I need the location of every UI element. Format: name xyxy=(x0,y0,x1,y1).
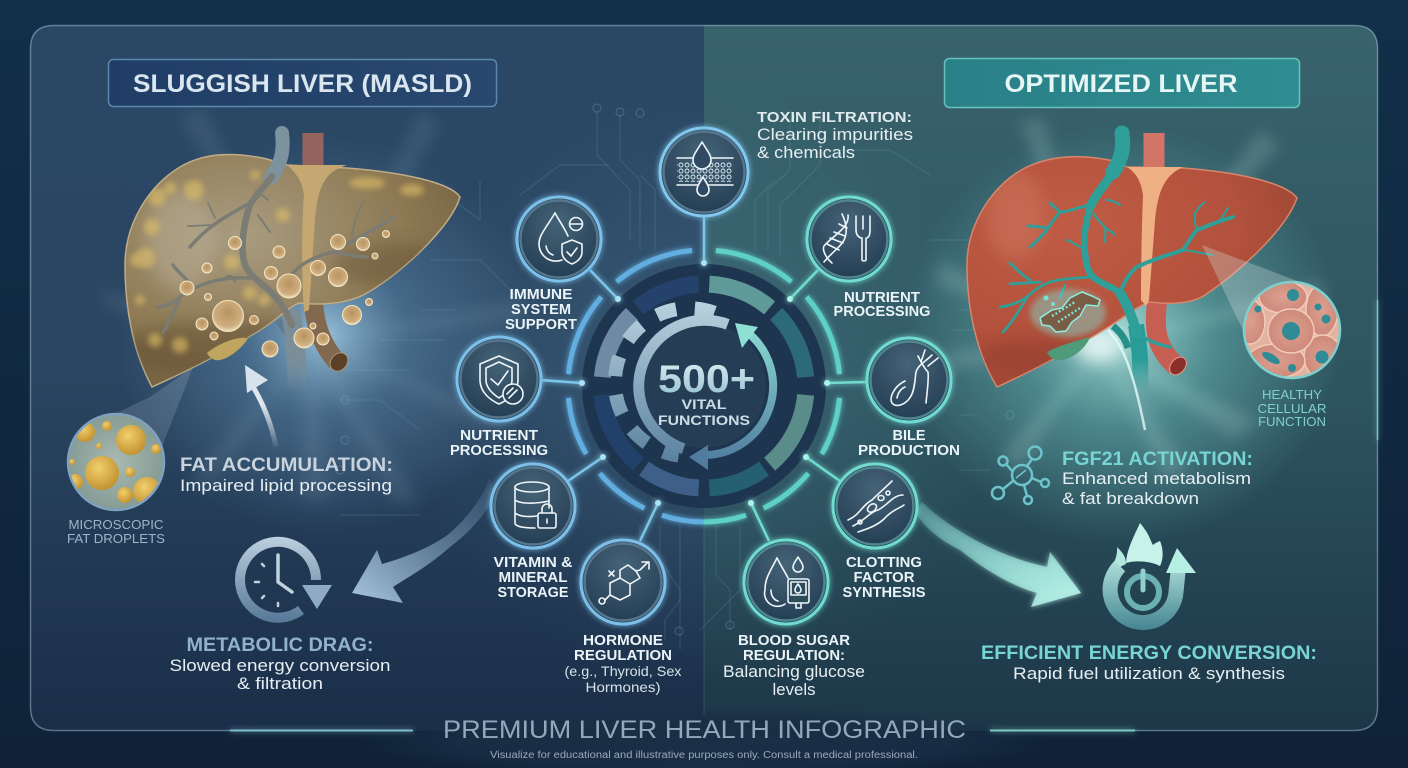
hub disc xyxy=(582,264,826,508)
illustration: healthy liver xyxy=(967,133,1297,430)
node: blood sugar regulation xyxy=(744,540,828,624)
outer glowing ring segments xyxy=(568,250,840,522)
text: clotting factor synthesis: FACTOR xyxy=(854,570,915,586)
node: vitamin and mineral storage xyxy=(491,464,575,548)
text: efficient energy conversion: EFFICIENT ENERGY CONVERSION: xyxy=(981,642,1317,664)
label: microscopic fat droplets xyxy=(67,518,165,546)
text: toxin filtration: & chemicals xyxy=(757,144,855,162)
text: clotting factor synthesis: SYNTHESIS xyxy=(842,585,926,601)
label: healthy cellular function: HEALTHY xyxy=(1262,387,1322,402)
text: bile production xyxy=(858,428,960,459)
illustration: fatty liver xyxy=(120,133,460,392)
text: bile production: PRODUCTION xyxy=(858,443,960,459)
icon: droplet through filter xyxy=(677,142,733,196)
text: FGF21 activation: & fat breakdown xyxy=(1062,490,1199,508)
text: hormone regulation: REGULATION xyxy=(574,648,672,664)
text: blood sugar regulation: Balancing glucose xyxy=(723,663,865,681)
text: fat accumulation: FAT ACCUMULATION: xyxy=(180,455,393,476)
text: nutrient processing right: NUTRIENT xyxy=(844,290,920,306)
callout wedge to cell view xyxy=(1202,245,1308,345)
label: healthy cellular function xyxy=(1258,387,1326,429)
text: nutrient processing right xyxy=(834,290,930,320)
arrow: center to efficient energy xyxy=(915,502,1081,607)
callout wedge to microscope xyxy=(85,367,193,452)
text: hormone regulation xyxy=(564,633,682,695)
text: bile production: BILE xyxy=(892,428,926,444)
icon: power flame with up arrow xyxy=(1110,523,1196,623)
text: vitamin and mineral storage xyxy=(494,555,573,601)
text: metabolic drag xyxy=(170,634,390,693)
icon: clock with downward arrow xyxy=(240,542,332,618)
label: healthy cellular function: FUNCTION xyxy=(1258,414,1326,429)
icon: molecule xyxy=(992,446,1049,504)
text: blood sugar regulation: REGULATION: xyxy=(743,648,845,664)
center glow and circuit traces xyxy=(336,86,1014,715)
heading: optimized liver: OPTIMIZED LIVER xyxy=(1004,70,1238,98)
circular arrows xyxy=(689,323,773,470)
text: clotting factor synthesis: CLOTTING xyxy=(846,555,922,571)
arrow pointing to the fatty deposit xyxy=(245,365,276,447)
text: toxin filtration: TOXIN FILTRATION: xyxy=(757,109,912,126)
center hub: 500+ vital functions xyxy=(568,250,840,522)
footer title: PREMIUM LIVER HEALTH INFOGRAPHIC xyxy=(443,716,966,744)
text: nutrient processing left xyxy=(450,428,548,459)
text: nutrient processing left: NUTRIENT xyxy=(460,428,538,444)
footer disclaimer: Visualize for educational and illustrative purposes only. Consult a medical professional. xyxy=(490,750,918,761)
heading: optimized liver xyxy=(944,58,1300,108)
text: hormone regulation: HORMONE xyxy=(583,633,663,649)
icon: DNA and fork xyxy=(823,214,870,263)
text: 500+ vital functions: 500+ xyxy=(658,358,755,401)
text: immune system support: SUPPORT xyxy=(505,317,577,333)
text: immune system support: SYSTEM xyxy=(511,302,571,318)
gear xyxy=(615,308,728,456)
text: metabolic drag: Slowed energy conversion xyxy=(170,657,390,675)
panel: sluggish liver xyxy=(67,60,535,693)
node: immune system support xyxy=(517,197,601,281)
fat droplets xyxy=(180,230,390,357)
icon: hormone molecule xyxy=(599,562,649,604)
text: hormone regulation: (e.g., Thyroid, Sex xyxy=(564,663,682,679)
icon: shield with check xyxy=(480,356,523,404)
text: efficient energy conversion: Rapid fuel utilization & synthesis xyxy=(1013,665,1285,683)
text: nutrient processing right: PROCESSING xyxy=(834,304,930,320)
text: vitamin and mineral storage: MINERAL xyxy=(498,570,568,586)
text: metabolic drag: METABOLIC DRAG: xyxy=(186,634,374,656)
text: efficient energy conversion xyxy=(981,642,1317,683)
label: healthy cellular function: CELLULAR xyxy=(1258,401,1326,416)
text: blood sugar regulation xyxy=(723,633,865,699)
liver glow and rays xyxy=(900,120,1340,545)
text: toxin filtration xyxy=(757,109,913,162)
text: 500+ vital functions: FUNCTIONS xyxy=(658,412,750,428)
text: blood sugar regulation: BLOOD SUGAR xyxy=(738,633,851,649)
node: hormone regulation xyxy=(581,540,665,624)
inner ring segments xyxy=(602,284,806,488)
liver glow and rays xyxy=(100,110,535,535)
node: clotting factor synthesis xyxy=(833,464,917,548)
icon: healthy cells xyxy=(1235,281,1342,379)
text: immune system support: IMMUNE xyxy=(510,287,573,303)
text: blood sugar regulation: levels xyxy=(772,681,816,699)
node: nutrient processing right xyxy=(807,197,891,281)
text: 500+ vital functions: VITAL xyxy=(682,396,727,412)
text: FGF21 activation: FGF21 ACTIVATION: xyxy=(1062,449,1253,470)
panel: optimized liver xyxy=(900,58,1342,683)
damaged tissue being repaired xyxy=(1030,289,1106,337)
node: nutrient processing left xyxy=(457,337,541,421)
icon: blood drop and glucose meter xyxy=(765,557,809,608)
text: 500+ vital functions xyxy=(658,358,755,428)
arrow: center to metabolic drag xyxy=(352,478,495,603)
text: toxin filtration: Clearing impurities xyxy=(757,126,913,144)
connectors from hub to function nodes xyxy=(540,216,867,541)
text: metabolic drag: & filtration xyxy=(237,675,323,693)
icon: blood vessel with clots xyxy=(848,481,904,532)
node: toxin filtration xyxy=(660,128,748,216)
icon: microscopic fat droplets xyxy=(67,414,164,510)
node: bile production xyxy=(867,338,951,422)
icon: drop shield pill xyxy=(539,213,582,264)
text: fat accumulation: Impaired lipid processing xyxy=(180,477,392,495)
heading: sluggish liver: SLUGGISH LIVER (MASLD) xyxy=(133,70,472,98)
text: nutrient processing left: PROCESSING xyxy=(450,443,548,459)
decorative panel glints xyxy=(230,300,1378,730)
text: fat accumulation xyxy=(180,455,393,495)
icon: storage drum with lock xyxy=(515,482,556,528)
text: clotting factor synthesis xyxy=(842,555,926,601)
label: microscopic fat droplets: MICROSCOPIC xyxy=(68,518,164,532)
text: FGF21 activation: Enhanced metabolism xyxy=(1062,470,1251,488)
heading: sluggish liver xyxy=(108,60,496,106)
text: hormone regulation: Hormones) xyxy=(586,679,660,695)
label: microscopic fat droplets: FAT DROPLETS xyxy=(67,532,165,546)
text: immune system support xyxy=(505,287,577,333)
text: vitamin and mineral storage: STORAGE xyxy=(498,585,569,601)
icon: gallbladder xyxy=(891,350,938,405)
text: FGF21 activation xyxy=(1062,449,1253,508)
text: vitamin and mineral storage: VITAMIN & xyxy=(494,555,573,571)
